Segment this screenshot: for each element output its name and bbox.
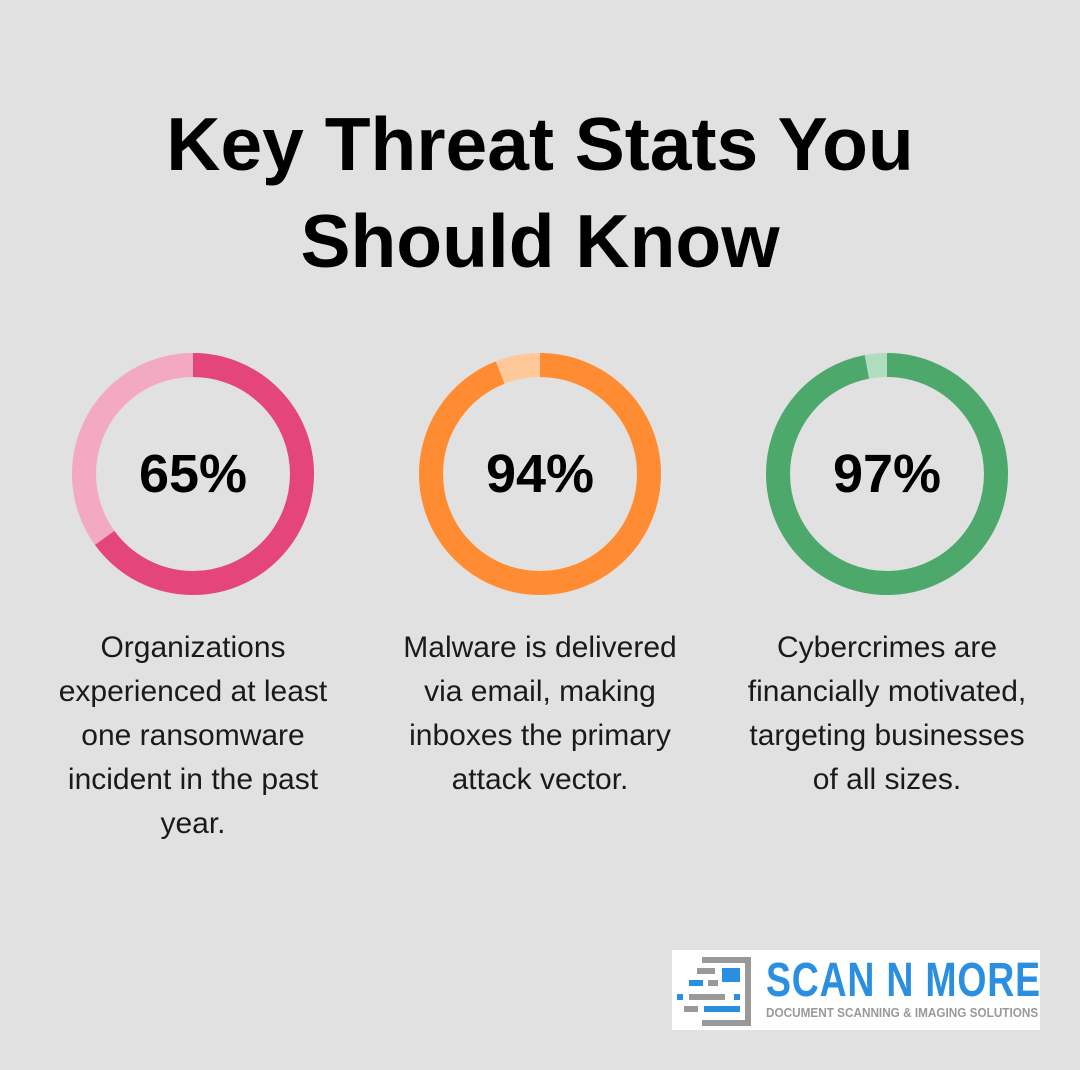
donut charts (72, 353, 1008, 595)
title (166, 102, 914, 283)
stat 97%: 97% (833, 444, 941, 504)
icon: scanner (677, 957, 751, 1026)
donut: 65% (84, 365, 302, 583)
caption 2: Malware is delivered via email, making inboxes the primary attack vector. (403, 631, 677, 796)
stat 65%: 65% (139, 444, 247, 504)
logo: DOCUMENT SCANNING & IMAGING SOLUTIONS (766, 1006, 1038, 1020)
logo text: SCAN N MORE (766, 954, 1041, 1007)
caption 3: Cybercrimes are financially motivated, targeting businesses of all sizes. (748, 631, 1026, 796)
title: Key Threat Stats You (166, 102, 914, 186)
donut: 97% (778, 365, 996, 583)
donut: 94% (431, 365, 649, 583)
stat 94%: 94% (486, 444, 594, 504)
caption 1: Organizations experienced at least one ransomware incident in the past year. (59, 631, 327, 840)
title: Should Know (300, 199, 780, 283)
logo (672, 950, 1040, 1030)
